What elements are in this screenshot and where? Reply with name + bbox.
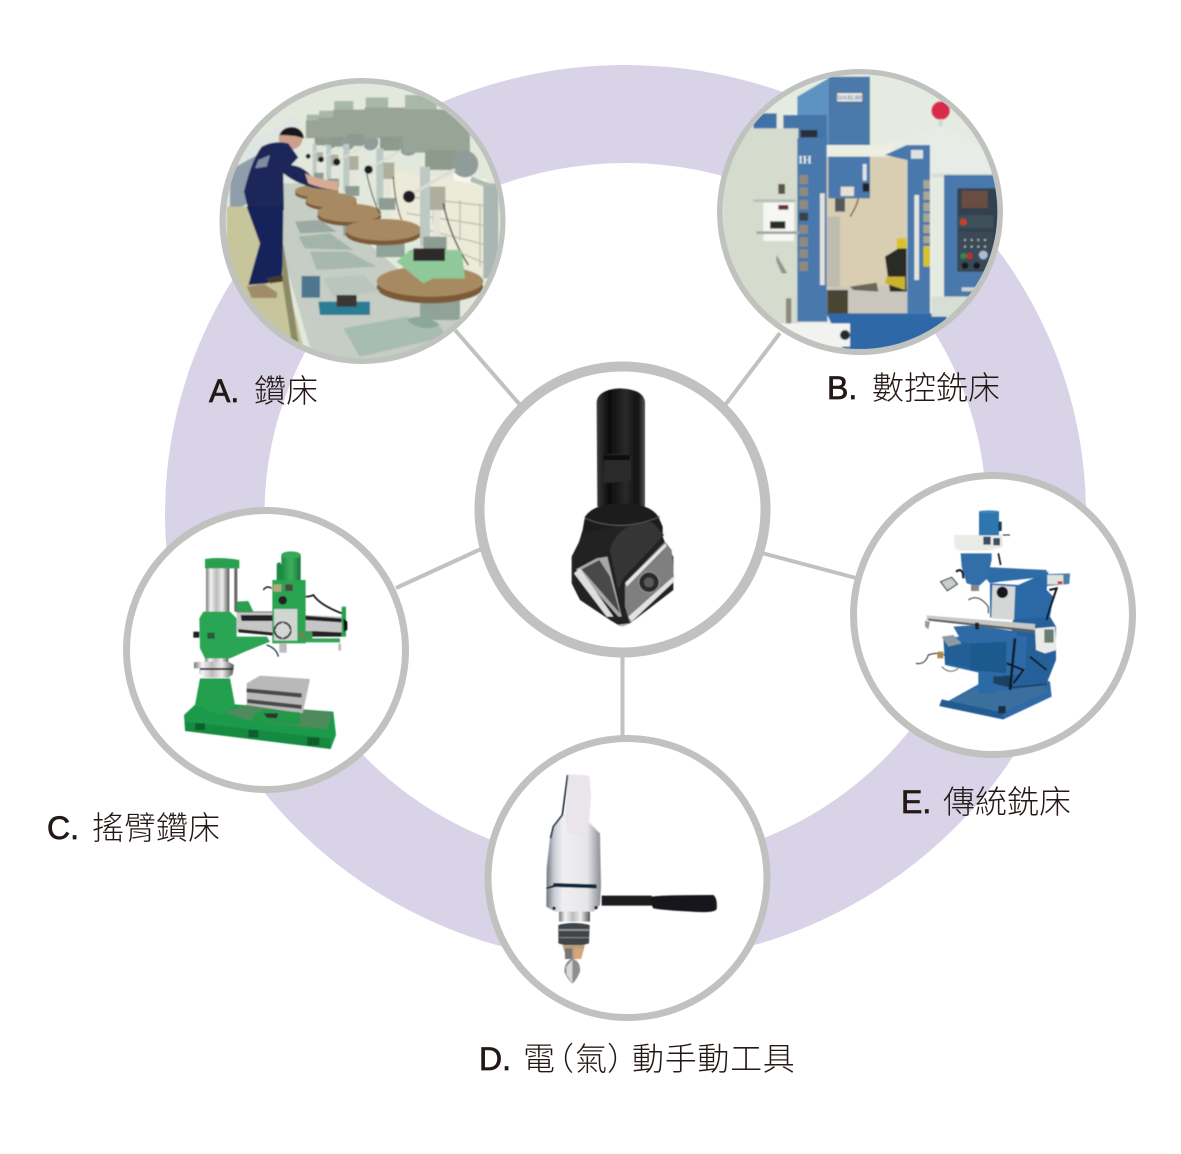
photo: blue CNC machining centre: IH xyxy=(798,154,812,166)
label C: C. xyxy=(47,810,79,846)
panel A: drill press row xyxy=(220,70,510,370)
panel E: traditional milling machine xyxy=(854,476,1132,754)
label E: 傳統銑床 xyxy=(943,784,1071,820)
illustration: green radial drill xyxy=(184,551,347,749)
label B: 數控銑床 xyxy=(872,370,1000,406)
illustration: right-angle hand drill xyxy=(546,774,717,984)
label A: A. xyxy=(209,373,239,409)
label B: B. xyxy=(827,370,857,406)
label D: 電 xyxy=(523,1041,555,1077)
label A: 鑽床 xyxy=(254,373,318,409)
label D: D. xyxy=(479,1041,511,1077)
panel centre: chamfer cutting tool xyxy=(480,366,766,652)
label D: 氣 xyxy=(575,1041,607,1077)
machine vise xyxy=(397,250,465,283)
purple ring background xyxy=(165,65,1086,963)
worker xyxy=(279,127,303,150)
label D: ） xyxy=(607,1041,639,1077)
photo: blue CNC machining centre xyxy=(722,74,998,349)
illustration: blue turret milling machine xyxy=(916,510,1070,719)
label E: E. xyxy=(901,784,931,820)
icon: indexable chamfer tool xyxy=(572,388,674,627)
photo: blue CNC machining centre: DASLIH xyxy=(837,95,862,102)
label C: 搖臂鑽床 xyxy=(92,810,220,846)
panel D: electric / pneumatic hand tool xyxy=(488,738,767,1018)
connector lines from centre tool to machines xyxy=(396,330,856,738)
label D: 動手動工具 xyxy=(632,1041,796,1077)
panel B: CNC milling machine xyxy=(710,60,1010,360)
photo: workshop with drill presses and worker xyxy=(226,84,500,358)
label D: （ xyxy=(542,1041,574,1077)
panel C: radial drilling machine xyxy=(126,510,406,790)
